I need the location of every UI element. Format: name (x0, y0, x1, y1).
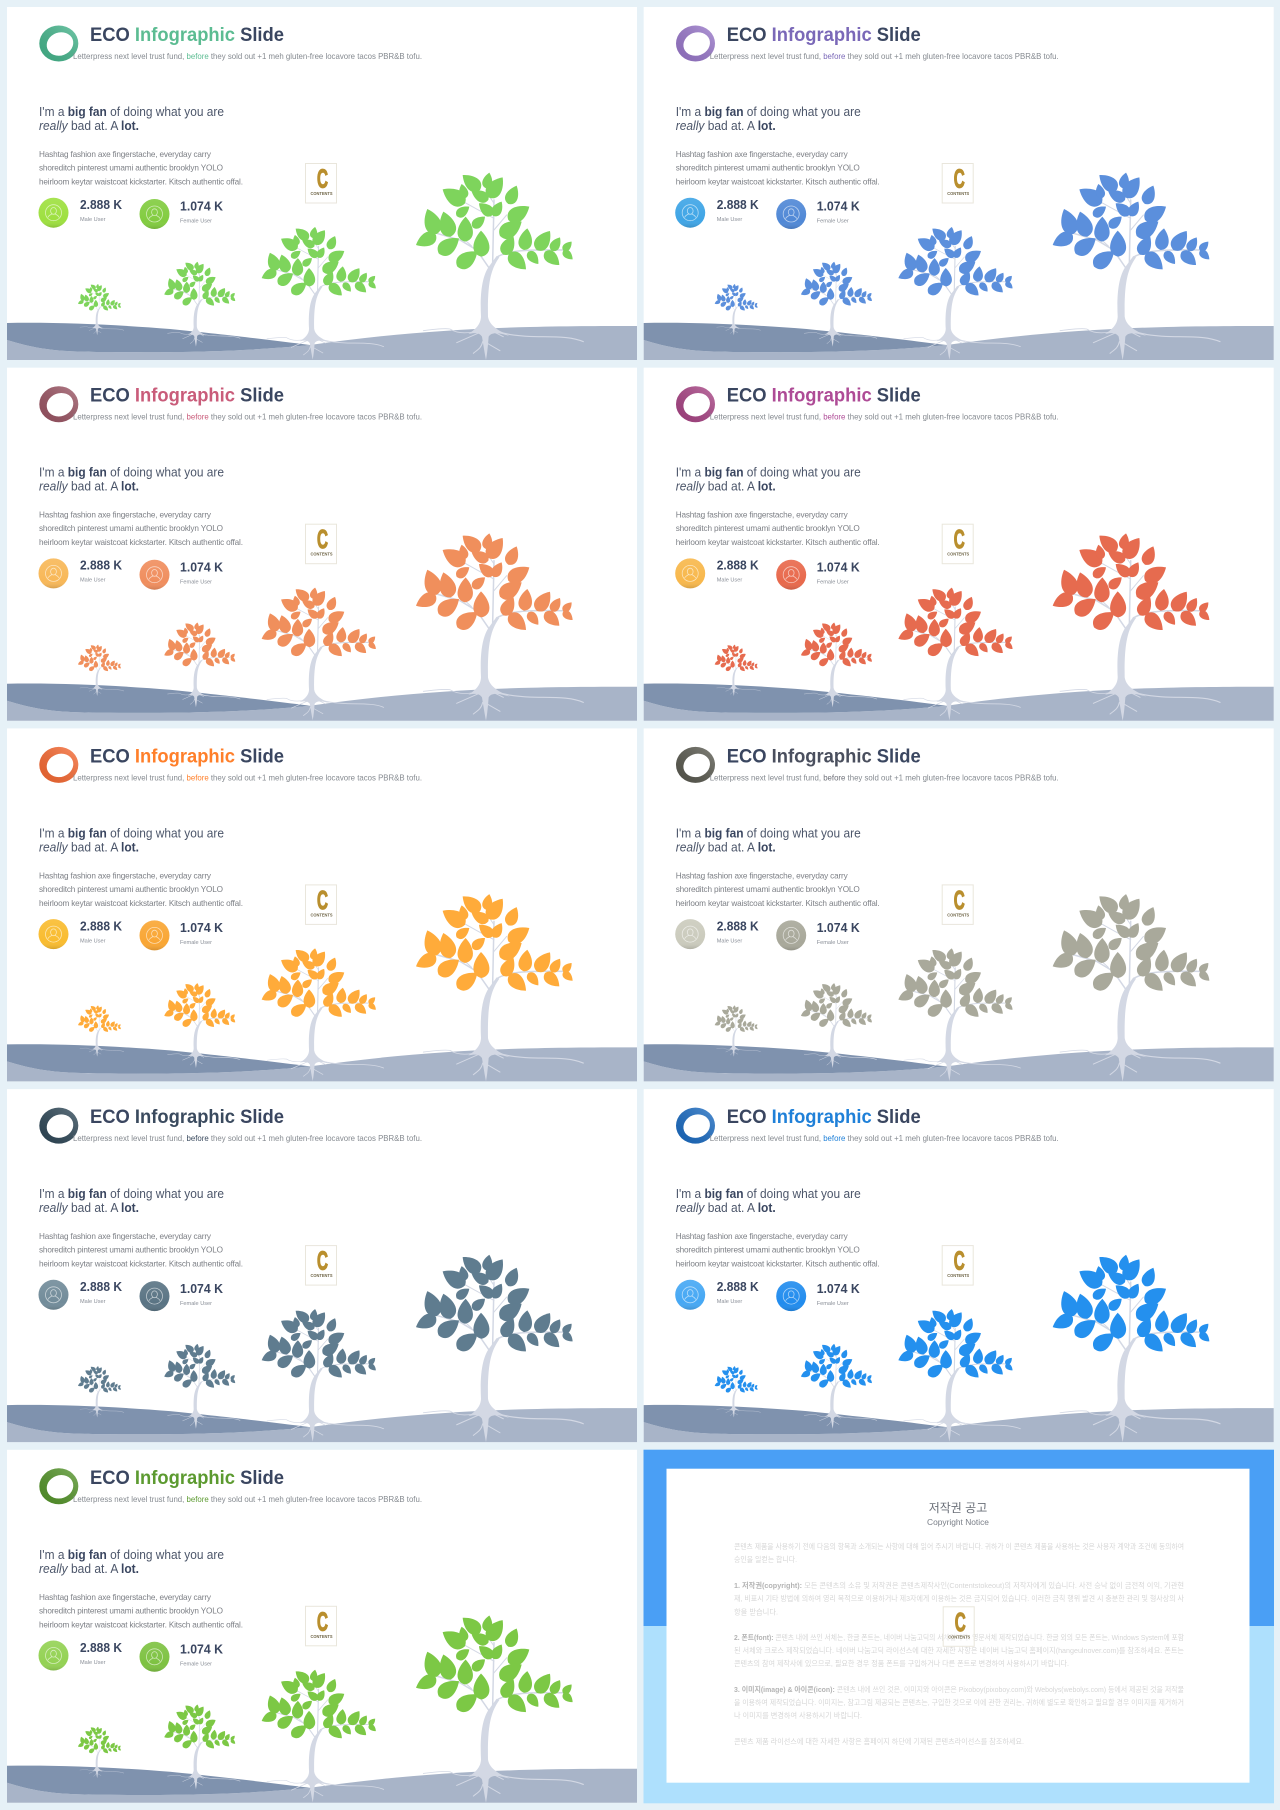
copyright text: 된 서체와 크로스 제작되었습니다. 네이버 나눔고딕 라이선스에 대한 자세한 사항은 네이버 나눔고딕 홈페이지(hangeulnover.com)를 참조하세요. 폰트는 (734, 1646, 1184, 1655)
ground hills (644, 323, 1274, 360)
tree: medium (259, 946, 384, 1081)
stat: female user (776, 1281, 860, 1311)
contents badge: C (317, 1246, 328, 1276)
copyright text: 항을 받습니다. (734, 1608, 778, 1616)
tree: large (1050, 1252, 1220, 1442)
panel: slide 4 red (644, 368, 1274, 721)
tree: young (163, 982, 240, 1068)
tree: medium (259, 225, 384, 360)
contents badge (942, 164, 973, 203)
stat: male user: Male User (80, 217, 106, 223)
paragraph: heirloom keytar waistcoat kickstarter. Kitsch authentic offal. (676, 538, 880, 547)
stat: male user: Male User (717, 938, 742, 944)
logo ring (676, 1108, 715, 1144)
panel: slide 5 orange (7, 728, 637, 1081)
panel: slide 9 leaf green (7, 1450, 637, 1803)
contents badge (306, 1606, 336, 1646)
contents badge: CONTENTS (310, 1634, 333, 1639)
title: ECO Infographic Slide (90, 25, 284, 46)
heading: really bad at. A lot. (676, 118, 776, 133)
title: ECO Infographic Slide (90, 746, 284, 767)
paragraph: shoreditch pinterest umami authentic brooklyn YOLO (39, 885, 223, 894)
contents badge (942, 1246, 973, 1285)
panel: slide 3 coral (7, 368, 637, 721)
stat: male user (38, 558, 123, 588)
heading (39, 1186, 224, 1215)
contents badge: C (317, 885, 328, 915)
paragraph: heirloom keytar waistcoat kickstarter. Kitsch authentic offal. (39, 538, 243, 547)
contents badge: C (954, 885, 965, 915)
stat: female user: 1.074 K (180, 1642, 224, 1657)
stat: male user (38, 1279, 123, 1310)
heading: I'm a big fan of doing what you are (39, 1547, 224, 1562)
copyright text: 나 이미지를 변경하여 사용하시기 바랍니다. (734, 1711, 862, 1720)
copyright heading: 저작권 공고 (929, 1501, 987, 1515)
contents badge (943, 1607, 974, 1646)
copyright text (734, 1542, 1184, 1746)
subtitle: Letterpress next level trust fund, before they sold out +1 meh gluten-free locavore tacos PBR&B tofu. (73, 52, 422, 61)
paragraph (39, 1232, 243, 1269)
contents badge: CONTENTS (947, 1273, 969, 1278)
copyright text: 을 이용하여 제작되었습니다. 이미지는, 참고그림 제공되는 콘텐츠는, 구입한 것으로 이에 관한 권리는, 귀하에 별도로 확인하고 필요할 경우 이미지를 제거하거 (734, 1698, 1184, 1707)
heading: really bad at. A lot. (676, 839, 776, 854)
subtitle: Letterpress next level trust fund, before they sold out +1 meh gluten-free locavore tacos PBR&B tofu. (73, 773, 422, 782)
tree: sapling (714, 644, 761, 696)
stat: male user (38, 918, 123, 949)
contents badge (942, 524, 973, 564)
subtitle: Letterpress next level trust fund, before they sold out +1 meh gluten-free locavore tacos PBR&B tofu. (73, 413, 422, 422)
contents badge: C (955, 1607, 966, 1637)
stat: male user: 2.888 K (717, 1279, 759, 1294)
stat: male user: 2.888 K (80, 1640, 123, 1655)
contents badge: CONTENTS (310, 912, 333, 917)
tree: medium (259, 1307, 384, 1442)
paragraph: Hashtag fashion axe fingerstache, everyday carry (676, 1232, 849, 1241)
stat: female user: 1.074 K (180, 559, 224, 574)
stat: male user: Male User (80, 578, 106, 584)
stat: female user: Female User (817, 219, 849, 225)
contents badge (306, 1246, 336, 1285)
tree: young (163, 260, 240, 347)
logo ring (39, 25, 78, 62)
contents badge: C (317, 1606, 328, 1636)
tree: sapling (77, 283, 124, 335)
heading: I'm a big fan of doing what you are (676, 104, 861, 119)
tree: young (163, 621, 240, 707)
ground hills (7, 684, 637, 721)
contents badge: CONTENTS (310, 552, 333, 557)
title: ECO Infographic Slide (727, 386, 921, 407)
panel: copyright notice (644, 1450, 1274, 1803)
copyright text: 3. 이미지(image) & 아이콘(icon): 콘텐츠 내에 쓰인 것은, 이미지와 아이콘은 Pixoboy(pixoboy.com)와 Webolys(webolys.com) 등에서 제공된 것을 저작물 (734, 1685, 1184, 1694)
contents badge: CONTENTS (948, 1634, 970, 1639)
tree: large (413, 530, 583, 721)
stat: female user: Female User (180, 1662, 212, 1668)
subtitle: Letterpress next level trust fund, before they sold out +1 meh gluten-free locavore tacos PBR&B tofu. (710, 413, 1059, 422)
tree: sapling (77, 644, 124, 696)
ground hills (7, 323, 637, 360)
stat: female user: 1.074 K (180, 199, 224, 214)
tree: sapling (77, 1365, 124, 1417)
subtitle: Letterpress next level trust fund, before they sold out +1 meh gluten-free locavore tacos PBR&B tofu. (710, 1134, 1059, 1143)
contents badge: CONTENTS (310, 191, 333, 196)
paragraph: heirloom keytar waistcoat kickstarter. Kitsch authentic offal. (39, 899, 243, 908)
title: ECO Infographic Slide (90, 1468, 284, 1489)
heading (39, 825, 224, 854)
paragraph: Hashtag fashion axe fingerstache, everyday carry (676, 511, 849, 520)
stat: female user (140, 559, 224, 590)
tree: medium (896, 946, 1020, 1081)
subtitle: Letterpress next level trust fund, before they sold out +1 meh gluten-free locavore tacos PBR&B tofu. (710, 52, 1059, 61)
tree: medium (896, 225, 1020, 360)
tree: young (163, 1342, 240, 1429)
tree: medium (259, 1668, 384, 1802)
heading (676, 104, 861, 133)
paragraph: Hashtag fashion axe fingerstache, everyday carry (676, 871, 849, 880)
contents badge: C (954, 164, 965, 194)
stat: female user: Female User (817, 579, 849, 585)
stat: female user: Female User (180, 219, 212, 225)
title: ECO Infographic Slide (90, 1107, 284, 1128)
paragraph: shoreditch pinterest umami authentic brooklyn YOLO (39, 1606, 223, 1615)
logo ring (676, 386, 715, 422)
stat: male user (675, 1279, 759, 1310)
stat: female user: 1.074 K (180, 1281, 224, 1296)
stat: female user (776, 920, 860, 950)
heading (676, 1186, 861, 1215)
logo ring (676, 25, 715, 62)
tree: sapling (714, 1005, 761, 1057)
heading (676, 465, 861, 494)
logo ring (39, 386, 78, 422)
stat: female user (140, 1642, 224, 1672)
stat: male user (38, 1640, 123, 1670)
stat: male user: Male User (717, 217, 742, 223)
subtitle: Letterpress next level trust fund, before they sold out +1 meh gluten-free locavore tacos PBR&B tofu. (73, 1134, 422, 1143)
heading: really bad at. A lot. (676, 479, 776, 494)
stat: female user (140, 920, 224, 950)
paragraph: heirloom keytar waistcoat kickstarter. Kitsch authentic offal. (676, 178, 880, 186)
copyright text: 콘텐츠 제품을 사용하기 전에 다음의 항목과 소개되는 사항에 대해 읽어 주시기 바랍니다. 귀하가 이 콘텐츠 제품을 사용하는 것은 사용자 계약과 조건에 동의하여 (734, 1542, 1184, 1551)
tree: young (163, 1703, 240, 1789)
heading: really bad at. A lot. (676, 1200, 776, 1215)
tree: medium (896, 586, 1020, 720)
tree: large (413, 170, 583, 360)
stat: female user (776, 559, 860, 590)
paragraph: Hashtag fashion axe fingerstache, everyday carry (39, 1593, 212, 1602)
copyright heading (927, 1501, 989, 1527)
paragraph: Hashtag fashion axe fingerstache, everyday carry (39, 150, 212, 159)
heading: I'm a big fan of doing what you are (676, 825, 861, 840)
stat: male user (38, 197, 123, 228)
heading: really bad at. A lot. (39, 839, 139, 854)
paragraph (39, 150, 243, 186)
panel: slide 6 grey (644, 728, 1274, 1081)
stat: male user: 2.888 K (80, 197, 123, 212)
stat: male user: Male User (80, 938, 106, 944)
stat: female user: 1.074 K (180, 920, 224, 935)
contents badge (942, 885, 973, 924)
title: ECO Infographic Slide (90, 386, 284, 407)
stat: female user: Female User (180, 579, 212, 585)
stat: female user: Female User (817, 940, 849, 946)
tree: large (413, 1252, 583, 1442)
ground hills (644, 1405, 1274, 1442)
paragraph: shoreditch pinterest umami authentic brooklyn YOLO (39, 1246, 223, 1255)
title: ECO Infographic Slide (727, 1107, 921, 1128)
copyright text: 재, 비표시 기타 방법에 의하여 영리 목적으로 이용하거나 제3자에게 이용하는 것은 금지되어 있습니다. 이러한 금칙 행위 발견 시 충분한 관리 및 형사상의 사 (734, 1594, 1184, 1603)
heading (39, 1547, 224, 1576)
tree: medium (896, 1307, 1020, 1442)
heading (676, 825, 861, 854)
heading (39, 465, 224, 494)
heading: really bad at. A lot. (39, 479, 139, 494)
paragraph (676, 150, 880, 186)
stat: male user (675, 197, 759, 228)
contents badge (306, 164, 336, 203)
tree: young (800, 982, 877, 1068)
contents badge: CONTENTS (947, 191, 969, 196)
tree: medium (259, 586, 384, 720)
paragraph (676, 511, 880, 547)
panel: slide 8 blue (644, 1089, 1274, 1442)
paragraph: shoreditch pinterest umami authentic brooklyn YOLO (676, 1246, 860, 1255)
contents badge: C (954, 1246, 965, 1276)
stat: female user: Female User (817, 1301, 849, 1307)
paragraph: shoreditch pinterest umami authentic brooklyn YOLO (39, 164, 223, 172)
stat: male user: 2.888 K (717, 558, 759, 573)
tree: sapling (714, 283, 761, 335)
stat: female user: Female User (180, 940, 212, 946)
title: ECO Infographic Slide (727, 25, 921, 46)
paragraph: shoreditch pinterest umami authentic brooklyn YOLO (676, 164, 860, 172)
stat: male user: Male User (717, 578, 742, 584)
subtitle: Letterpress next level trust fund, before they sold out +1 meh gluten-free locavore tacos PBR&B tofu. (710, 773, 1059, 782)
copyright text: 2. 폰트(font): 콘텐츠 내에 쓰인 서체는, 한글 폰트는, 네이버 나눔고딕의 서체입니다. 영문서체 제작되었습니다. 한글 외의 모든 폰트는, Windows System에 포함 (734, 1633, 1184, 1642)
tree: sapling (77, 1005, 124, 1057)
tree: large (413, 1612, 583, 1803)
paragraph (676, 1232, 880, 1269)
paragraph (39, 871, 243, 908)
stat: female user: 1.074 K (817, 559, 860, 574)
heading: I'm a big fan of doing what you are (39, 825, 224, 840)
heading: really bad at. A lot. (39, 1561, 139, 1576)
stat: female user: Female User (180, 1301, 212, 1307)
tree: large (1050, 530, 1220, 721)
contents badge: C (317, 164, 328, 194)
paragraph: shoreditch pinterest umami authentic brooklyn YOLO (676, 524, 860, 533)
stat: male user: Male User (717, 1299, 742, 1305)
stat: male user: Male User (80, 1660, 106, 1666)
stat: female user: 1.074 K (817, 920, 860, 935)
tree: large (1050, 170, 1220, 360)
paragraph: heirloom keytar waistcoat kickstarter. Kitsch authentic offal. (39, 1620, 243, 1629)
paragraph (676, 871, 880, 908)
heading: really bad at. A lot. (39, 1200, 139, 1215)
tree: sapling (77, 1726, 124, 1778)
panel: slide 7 slate (7, 1089, 637, 1442)
stat: female user (140, 1281, 224, 1311)
panel: slide 2 purple (644, 7, 1274, 360)
heading: I'm a big fan of doing what you are (39, 1186, 224, 1201)
paragraph: Hashtag fashion axe fingerstache, everyday carry (39, 1232, 212, 1241)
logo ring (676, 747, 715, 783)
stat: female user (776, 199, 860, 229)
paragraph: heirloom keytar waistcoat kickstarter. Kitsch authentic offal. (676, 899, 880, 908)
copyright text: 콘텐츠 제품 라이선스에 대한 자세한 사항은 홈페이지 하단에 기재된 콘텐츠라이선스를 참조하세요. (734, 1737, 1024, 1746)
title: ECO Infographic Slide (727, 746, 921, 767)
heading: I'm a big fan of doing what you are (39, 104, 224, 119)
heading: I'm a big fan of doing what you are (676, 1186, 861, 1201)
copyright text: 승인을 일컫는 합니다. (734, 1555, 797, 1564)
logo ring (39, 1468, 78, 1504)
contents badge: C (954, 524, 965, 554)
tree: large (413, 891, 583, 1081)
ground hills (644, 684, 1274, 721)
contents badge (306, 885, 336, 924)
paragraph (39, 1593, 243, 1629)
heading: I'm a big fan of doing what you are (39, 465, 224, 480)
stat: female user (140, 199, 224, 229)
stat: male user (675, 918, 759, 949)
panel: slide 1 green (7, 7, 637, 360)
heading: really bad at. A lot. (39, 118, 139, 133)
contents badge: CONTENTS (947, 912, 969, 917)
ground hills (7, 1766, 637, 1803)
ground hills (7, 1405, 637, 1442)
stat: male user: 2.888 K (80, 1279, 123, 1294)
paragraph: heirloom keytar waistcoat kickstarter. Kitsch authentic offal. (39, 1260, 243, 1269)
logo ring (39, 747, 78, 783)
paragraph: heirloom keytar waistcoat kickstarter. Kitsch authentic offal. (676, 1260, 880, 1269)
stat: male user: 2.888 K (717, 197, 759, 212)
paragraph: Hashtag fashion axe fingerstache, everyday carry (676, 150, 849, 159)
contents badge (306, 524, 336, 564)
copyright text: 콘텐츠의 참여 제작사에 있으므로, 필요한 경우 정품 폰트를 구입하거나 다른 폰트로 변경하여 사용하시기 바랍니다. (734, 1659, 1069, 1668)
contents badge: CONTENTS (947, 552, 969, 557)
contents badge: C (317, 524, 328, 554)
stat: male user: Male User (80, 1299, 106, 1305)
copyright heading: Copyright Notice (927, 1517, 989, 1527)
tree: large (1050, 891, 1220, 1081)
heading: I'm a big fan of doing what you are (676, 465, 861, 480)
tree: young (800, 621, 877, 707)
subtitle: Letterpress next level trust fund, before they sold out +1 meh gluten-free locavore tacos PBR&B tofu. (73, 1495, 422, 1504)
ground hills (644, 1044, 1274, 1081)
stat: male user (675, 558, 759, 588)
paragraph: heirloom keytar waistcoat kickstarter. Kitsch authentic offal. (39, 178, 243, 186)
paragraph: shoreditch pinterest umami authentic brooklyn YOLO (676, 885, 860, 894)
stat: male user: 2.888 K (717, 918, 759, 933)
contents badge: CONTENTS (310, 1273, 333, 1278)
stat: female user: 1.074 K (817, 199, 860, 214)
ground hills (7, 1044, 637, 1081)
paragraph: Hashtag fashion axe fingerstache, everyday carry (39, 511, 212, 520)
paragraph: shoreditch pinterest umami authentic brooklyn YOLO (39, 524, 223, 533)
tree: young (800, 260, 877, 347)
stat: male user: 2.888 K (80, 918, 123, 933)
paragraph: Hashtag fashion axe fingerstache, everyday carry (39, 871, 212, 880)
copyright text: 1. 저작권(copyright): 모든 콘텐츠의 소유 및 저작권은 콘텐츠제작사인(Contentstokeout)의 저작자에게 있습니다. 사전 승낙 없이 금전적 이익, 기관현 (734, 1581, 1184, 1590)
heading (39, 104, 224, 133)
logo ring (39, 1108, 78, 1144)
tree: young (800, 1342, 877, 1429)
stat: male user: 2.888 K (80, 558, 123, 573)
paragraph (39, 511, 243, 547)
tree: sapling (714, 1365, 761, 1417)
stat: female user: 1.074 K (817, 1281, 860, 1296)
